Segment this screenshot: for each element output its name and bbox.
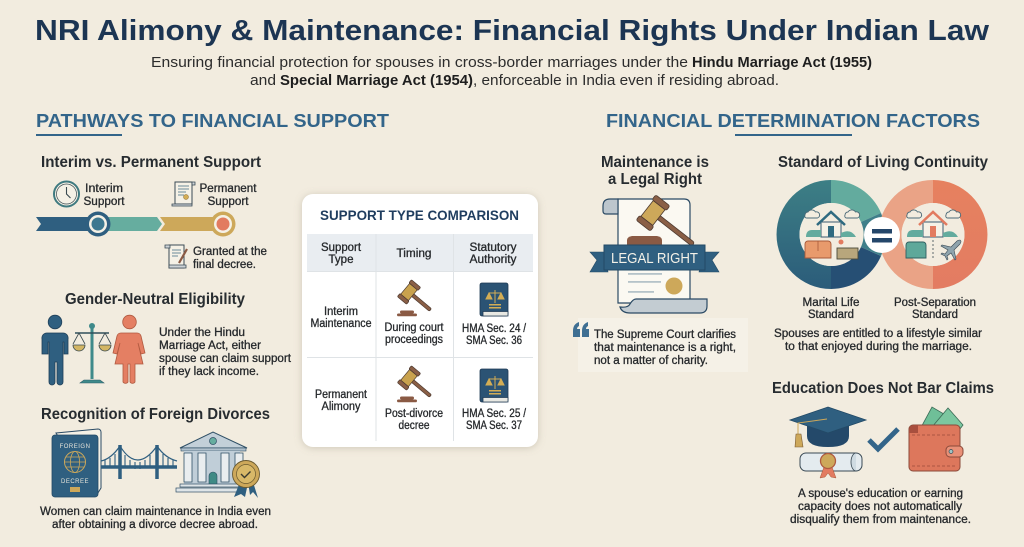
table header row: Type: [328, 254, 354, 266]
icon: decree scroll with pen: [165, 245, 187, 268]
row: interim maintenance: proceedings: [385, 334, 443, 346]
heading: gender-neutral: Gender-Neutral Eligibility: [65, 291, 245, 308]
heading: pathways to financial support: PATHWAYS TO FINANCIAL SUPPORT: [36, 110, 390, 131]
icon: marital house and furniture: [805, 210, 860, 259]
icon: scales of justice: [73, 323, 111, 383]
subtitle: Ensuring financial protection for spouses in cross-border marriages under the: [151, 54, 688, 71]
text: eligibility: spouse can claim support: [159, 353, 292, 365]
timeline arrow: [36, 212, 236, 236]
label: interim support: Interim: [85, 183, 123, 195]
label: interim support: [84, 183, 125, 208]
table header row: Timing: [396, 248, 432, 260]
text: eligibility: [159, 327, 292, 378]
panel: gender-neutral eligibility: [42, 291, 292, 385]
text: education: A spouse's education or earning: [798, 488, 963, 500]
icon: wallet with cash: [909, 407, 963, 471]
table title: SUPPORT TYPE COMPARISON: [320, 207, 519, 223]
caption: foreign divorces: after obtaining a divorce decree abroad.: [52, 519, 258, 531]
label: marital life standard: Standard: [808, 309, 854, 321]
row: interim maintenance: [310, 280, 527, 347]
icon: post-separation house and travel: [906, 210, 961, 260]
text: eligibility: Marriage Act, either: [159, 340, 261, 352]
panel: recognition of foreign divorces: [40, 406, 271, 531]
subtitle: Special Marriage Act (1954): [280, 72, 473, 89]
heading: legal right: [601, 154, 709, 188]
row: permanent alimony: Alimony: [322, 401, 361, 413]
row: permanent alimony: SMA Sec. 37: [466, 420, 522, 432]
icon: check mark: [869, 429, 898, 449]
panel: interim vs permanent support: [36, 154, 267, 271]
callout: supreme court quote: The Supreme Court clarifies: [594, 329, 736, 341]
chart: post-separation ring: [879, 180, 987, 289]
row: permanent alimony: HMA Sec. 25 /: [462, 408, 527, 420]
icon: diploma: [800, 453, 862, 478]
icon: certificate document: [172, 182, 195, 206]
table header row: Statutory: [470, 242, 517, 254]
row: interim maintenance: Maintenance: [310, 318, 372, 330]
callout: supreme court quote: [573, 318, 748, 372]
caption: foreign divorces: [40, 506, 271, 531]
heading: foreign divorces: Recognition of Foreign Divorces: [41, 406, 270, 423]
panel: support type comparison table: [302, 194, 538, 447]
label: post-separation standard: [894, 297, 976, 321]
callout: supreme court quote: not a matter of charity.: [594, 355, 708, 367]
label: marital life standard: [802, 297, 860, 321]
icon: legal right scroll with gavel: [590, 195, 719, 313]
label: post-separation standard: Post-Separation: [894, 297, 976, 309]
subtitle: Hindu Marriage Act (1955): [692, 54, 872, 71]
subtitle: [151, 54, 872, 89]
note: granted at final decree: [193, 246, 267, 271]
text: eligibility: if they lack income.: [159, 366, 259, 378]
heading: legal right: Maintenance is: [601, 154, 709, 171]
table header row: Authority: [470, 254, 517, 266]
row: interim maintenance: During court: [384, 322, 444, 334]
text: education: capacity does not automatically: [798, 501, 962, 513]
row: permanent alimony: Permanent: [315, 389, 368, 401]
row: permanent alimony: Post-divorce: [385, 408, 443, 420]
subtitle: , enforceable in India even if residing abroad.: [473, 72, 779, 89]
text: lifestyle: [774, 328, 982, 353]
row: permanent alimony: decree: [398, 420, 430, 432]
text: lifestyle: Spouses are entitled to a lifestyle similar: [774, 328, 982, 340]
label: post-separation standard: Standard: [912, 309, 958, 321]
text: education: disqualify them from maintenance.: [790, 514, 971, 526]
label: permanent support: Permanent: [200, 183, 257, 195]
icon: equals sign: [864, 217, 900, 253]
table header row: Support: [321, 242, 362, 254]
icon: courthouse with seal: [176, 432, 260, 498]
label: interim support: Support: [84, 196, 125, 208]
label: permanent support: [200, 183, 257, 208]
heading: interim vs permanent: Interim vs. Permanent Support: [41, 154, 262, 171]
row: permanent alimony: [315, 366, 527, 432]
panel: maintenance is a legal right: [573, 154, 748, 372]
icon: legal right scroll with gavel: LEGAL RIGHT: [611, 250, 698, 267]
caption: foreign divorces: Women can claim maintenance in India even: [40, 506, 271, 518]
icon: quote mark: [573, 322, 589, 337]
chart: marital life ring: [777, 180, 885, 289]
table header row: [307, 234, 533, 271]
panel: education does not bar claims: [772, 380, 994, 526]
callout: supreme court quote: that maintenance is a right,: [594, 342, 736, 354]
icon: man figure: [42, 315, 68, 385]
label: marital life standard: Marital Life: [802, 297, 860, 309]
panel: standard of living continuity: [774, 154, 988, 353]
icon: clock: [54, 182, 79, 206]
note: granted at final decree: final decree.: [193, 259, 256, 271]
icon: foreign decree passport: DECREE: [61, 479, 89, 485]
row: interim maintenance: SMA Sec. 36: [466, 335, 522, 347]
subtitle: and: [250, 72, 276, 89]
text: eligibility: Under the Hindu: [159, 327, 245, 339]
heading: legal right: a Legal Right: [608, 171, 703, 188]
note: granted at final decree: Granted at the: [193, 246, 267, 258]
label: permanent support: Support: [208, 196, 249, 208]
text: lifestyle: to that enjoyed during the marriage.: [785, 341, 972, 353]
text: education: [790, 488, 971, 526]
row: interim maintenance: HMA Sec. 24 /: [462, 323, 527, 335]
row: interim maintenance: Interim: [324, 306, 358, 318]
icon: foreign decree passport: FOREIGN: [60, 444, 90, 450]
heading: standard of living: Standard of Living Continuity: [778, 154, 988, 171]
icon: bridge: [101, 445, 177, 479]
title: NRI Alimony & Maintenance: Financial Rights Under Indian Law: [35, 15, 989, 47]
heading: education: Education Does Not Bar Claims: [772, 380, 994, 397]
heading: financial determination factors: FINANCIAL DETERMINATION FACTORS: [606, 110, 980, 131]
icon: woman figure: [113, 315, 145, 383]
icon: foreign decree passport: [52, 429, 101, 497]
icon: graduation cap: [790, 407, 866, 447]
